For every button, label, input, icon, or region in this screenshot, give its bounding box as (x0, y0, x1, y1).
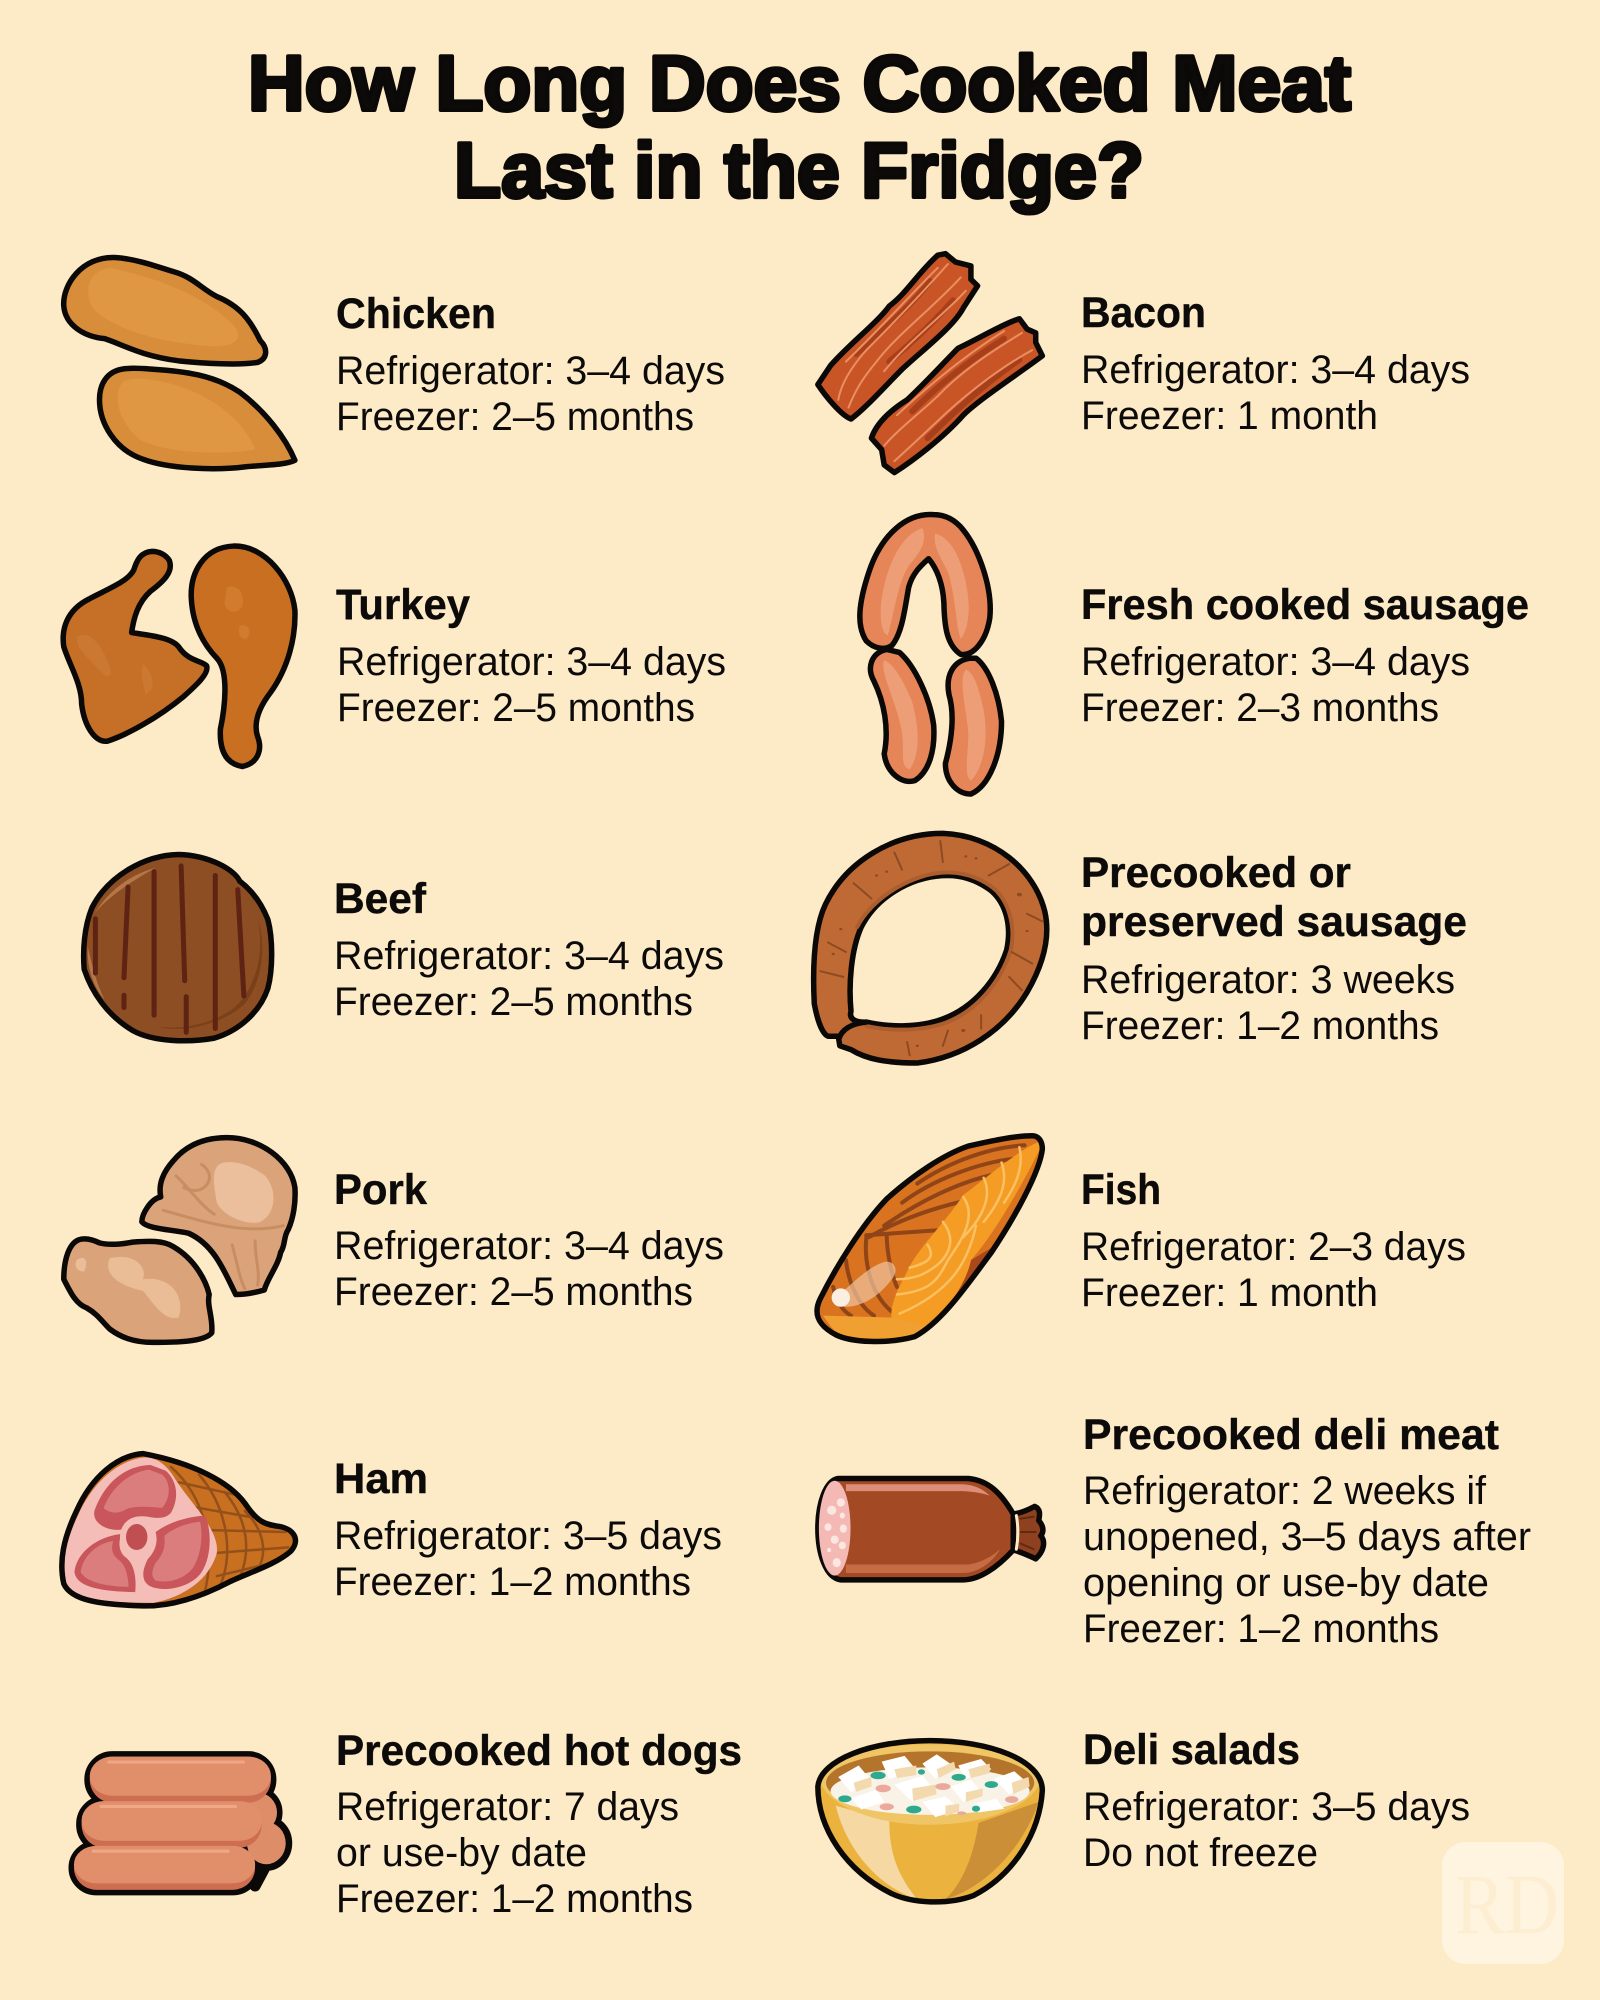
text: beef: Refrigerator: 3–4 days (334, 934, 724, 978)
title: How Long Does Cooked Meat (248, 39, 1351, 127)
text: fresh sausage (1081, 581, 1529, 730)
text: bacon: Refrigerator: 3–4 days (1081, 348, 1470, 392)
icon: chicken breasts (64, 257, 295, 469)
text: fish: Fish (1081, 1166, 1161, 1214)
text: ham: Refrigerator: 3–5 days (334, 1514, 722, 1558)
text: preserved sausage: Refrigerator: 3 weeks (1081, 958, 1455, 1002)
text: ham: Freezer: 1–2 months (334, 1560, 691, 1604)
panel: beef (84, 854, 724, 1041)
icon: salad bowl (818, 1741, 1042, 1902)
text: ham: Ham (334, 1455, 428, 1503)
panel: deli meat (818, 1411, 1531, 1651)
text: bacon: Freezer: 1 month (1081, 394, 1378, 438)
text: deli meat: Freezer: 1–2 months (1083, 1607, 1439, 1651)
text: ham (334, 1455, 722, 1604)
text: chicken: Freezer: 2–5 months (336, 395, 694, 439)
text: deli meat (1083, 1411, 1531, 1651)
text: beef: Beef (334, 875, 427, 923)
text: fresh sausage: Refrigerator: 3–4 days (1081, 640, 1470, 684)
text: hot dogs: or use-by date (336, 1831, 587, 1875)
panel: fresh sausage (860, 515, 1529, 794)
icon: pork chops (64, 1138, 295, 1342)
text: chicken: Refrigerator: 3–4 days (336, 349, 725, 393)
text: turkey: Refrigerator: 3–4 days (337, 640, 726, 684)
text: deli salads: Refrigerator: 3–5 days (1083, 1785, 1470, 1829)
text: preserved sausage: Freezer: 1–2 months (1081, 1004, 1439, 1048)
panel: turkey (63, 546, 726, 766)
text: deli meat: opening or use-by date (1083, 1561, 1489, 1605)
icon: turkey legs (63, 546, 295, 766)
text: deli salads: Deli salads (1083, 1726, 1300, 1774)
text: turkey: Freezer: 2–5 months (337, 686, 695, 730)
text: fish (1081, 1166, 1466, 1315)
panel: deli salads (818, 1726, 1470, 1902)
text: preserved sausage: preserved sausage (1081, 898, 1467, 946)
text: pork: Refrigerator: 3–4 days (334, 1224, 724, 1268)
text: fresh sausage: Freezer: 2–3 months (1081, 686, 1439, 730)
title: Last in the Fridge? (454, 126, 1144, 214)
panel: preserved sausage (814, 833, 1467, 1063)
text: deli meat: Refrigerator: 2 weeks if (1083, 1469, 1487, 1513)
text: hot dogs: Precooked hot dogs (336, 1727, 742, 1775)
text: hot dogs (336, 1727, 742, 1921)
icon: bacon strips (818, 254, 1042, 473)
text: beef (334, 875, 724, 1024)
text: pork: Freezer: 2–5 months (334, 1270, 693, 1314)
icon: sausage links (860, 515, 1002, 794)
icon: beef patty (84, 854, 272, 1041)
text: bacon (1081, 289, 1470, 438)
panel: fish (817, 1136, 1466, 1342)
text: fish: Refrigerator: 2–3 days (1081, 1225, 1466, 1269)
text: turkey: Turkey (336, 581, 470, 629)
title (248, 39, 1351, 214)
icon: deli meat (818, 1478, 1044, 1580)
icon: ham (62, 1454, 295, 1606)
text: fresh sausage: Fresh cooked sausage (1081, 581, 1529, 629)
text: beef: Freezer: 2–5 months (334, 980, 693, 1024)
text: deli salads: Do not freeze (1083, 1831, 1318, 1875)
panel: hot dogs (74, 1727, 742, 1921)
text: pork: Pork (334, 1166, 427, 1214)
icon: hot dogs (74, 1757, 287, 1890)
logo: RD watermark (1442, 1842, 1564, 1964)
text: pork (334, 1166, 724, 1314)
text: deli salads (1083, 1726, 1470, 1875)
text: preserved sausage: Precooked or (1081, 849, 1351, 897)
text: hot dogs: Freezer: 1–2 months (336, 1877, 693, 1921)
panel: ham (62, 1454, 722, 1606)
icon: salmon fillet (817, 1136, 1042, 1342)
panel: chicken (64, 257, 725, 469)
text: chicken: Chicken (336, 290, 496, 338)
text: hot dogs: Refrigerator: 7 days (336, 1785, 679, 1829)
text: bacon: Bacon (1081, 289, 1206, 337)
text: deli meat: Precooked deli meat (1083, 1411, 1499, 1459)
panel: pork (64, 1138, 724, 1342)
icon: sausage ring (814, 833, 1047, 1063)
logo: RD watermark: RD (1455, 1856, 1559, 1952)
panel: bacon (818, 254, 1470, 473)
text: fish: Freezer: 1 month (1081, 1271, 1378, 1315)
text: chicken (336, 290, 725, 439)
text: turkey (336, 581, 726, 730)
text: deli meat: unopened, 3–5 days after (1083, 1515, 1531, 1559)
text: preserved sausage (1081, 849, 1467, 1048)
